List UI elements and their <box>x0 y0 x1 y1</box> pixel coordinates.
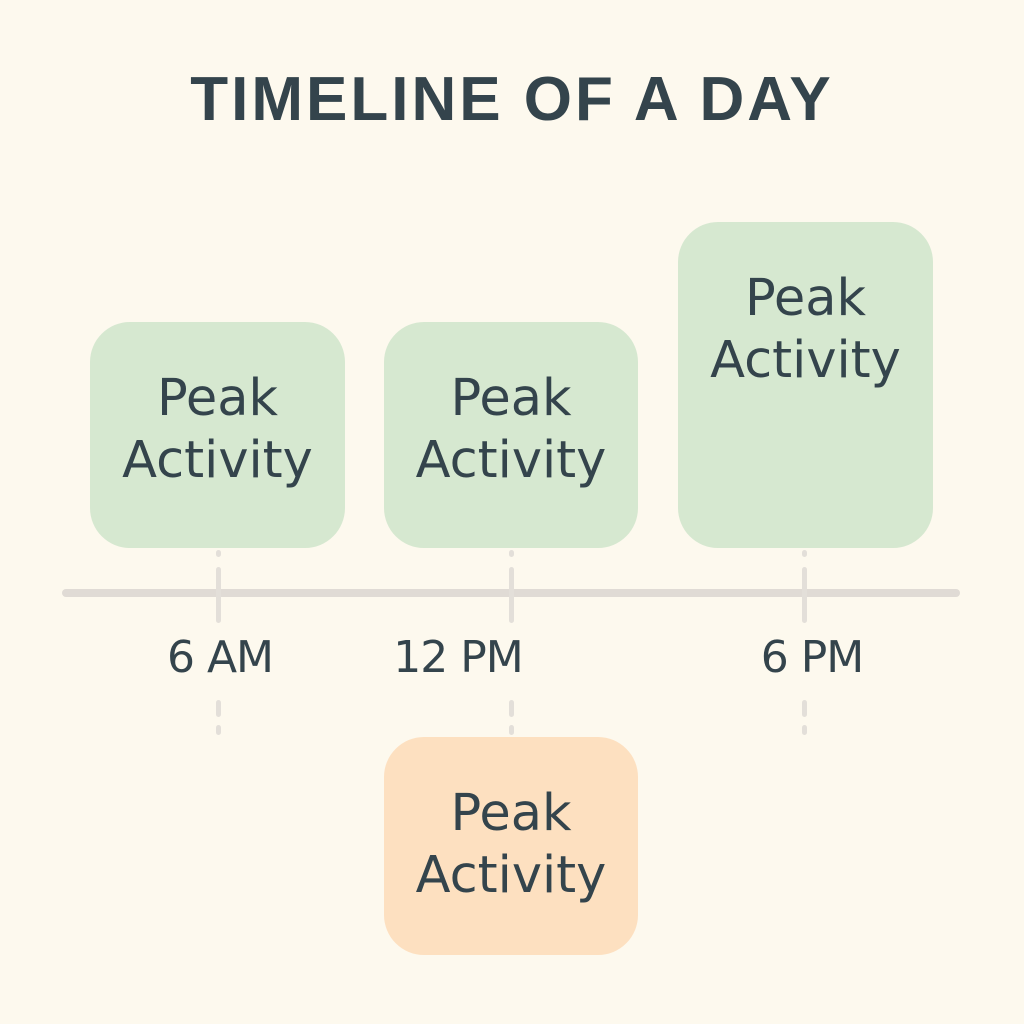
timeline axis <box>62 589 960 597</box>
card: below timeline (orange) <box>384 737 638 955</box>
card: 6 AM peak: Peak <box>157 369 278 428</box>
card: 6 PM peak: Activity <box>710 331 901 390</box>
card: 12 PM peak: Activity <box>416 431 606 490</box>
card: 6 AM peak: Activity <box>122 431 313 490</box>
tick 12pm <box>509 550 514 735</box>
title: TIMELINE OF A DAY <box>190 65 834 134</box>
tick 6pm <box>802 550 807 735</box>
card: 6 PM peak <box>678 222 933 548</box>
card: below timeline (orange): Activity <box>416 846 606 905</box>
tick 6am <box>216 550 221 735</box>
card: 6 PM peak: Peak <box>745 269 866 328</box>
label 12 PM: 12 PM <box>393 632 523 683</box>
card: 12 PM peak <box>384 322 638 548</box>
label 6 AM: 6 AM <box>167 632 273 683</box>
label 6 PM: 6 PM <box>761 632 863 683</box>
card: 12 PM peak: Peak <box>450 369 572 428</box>
card: 6 AM peak <box>90 322 345 548</box>
card: below timeline (orange): Peak <box>450 784 572 843</box>
